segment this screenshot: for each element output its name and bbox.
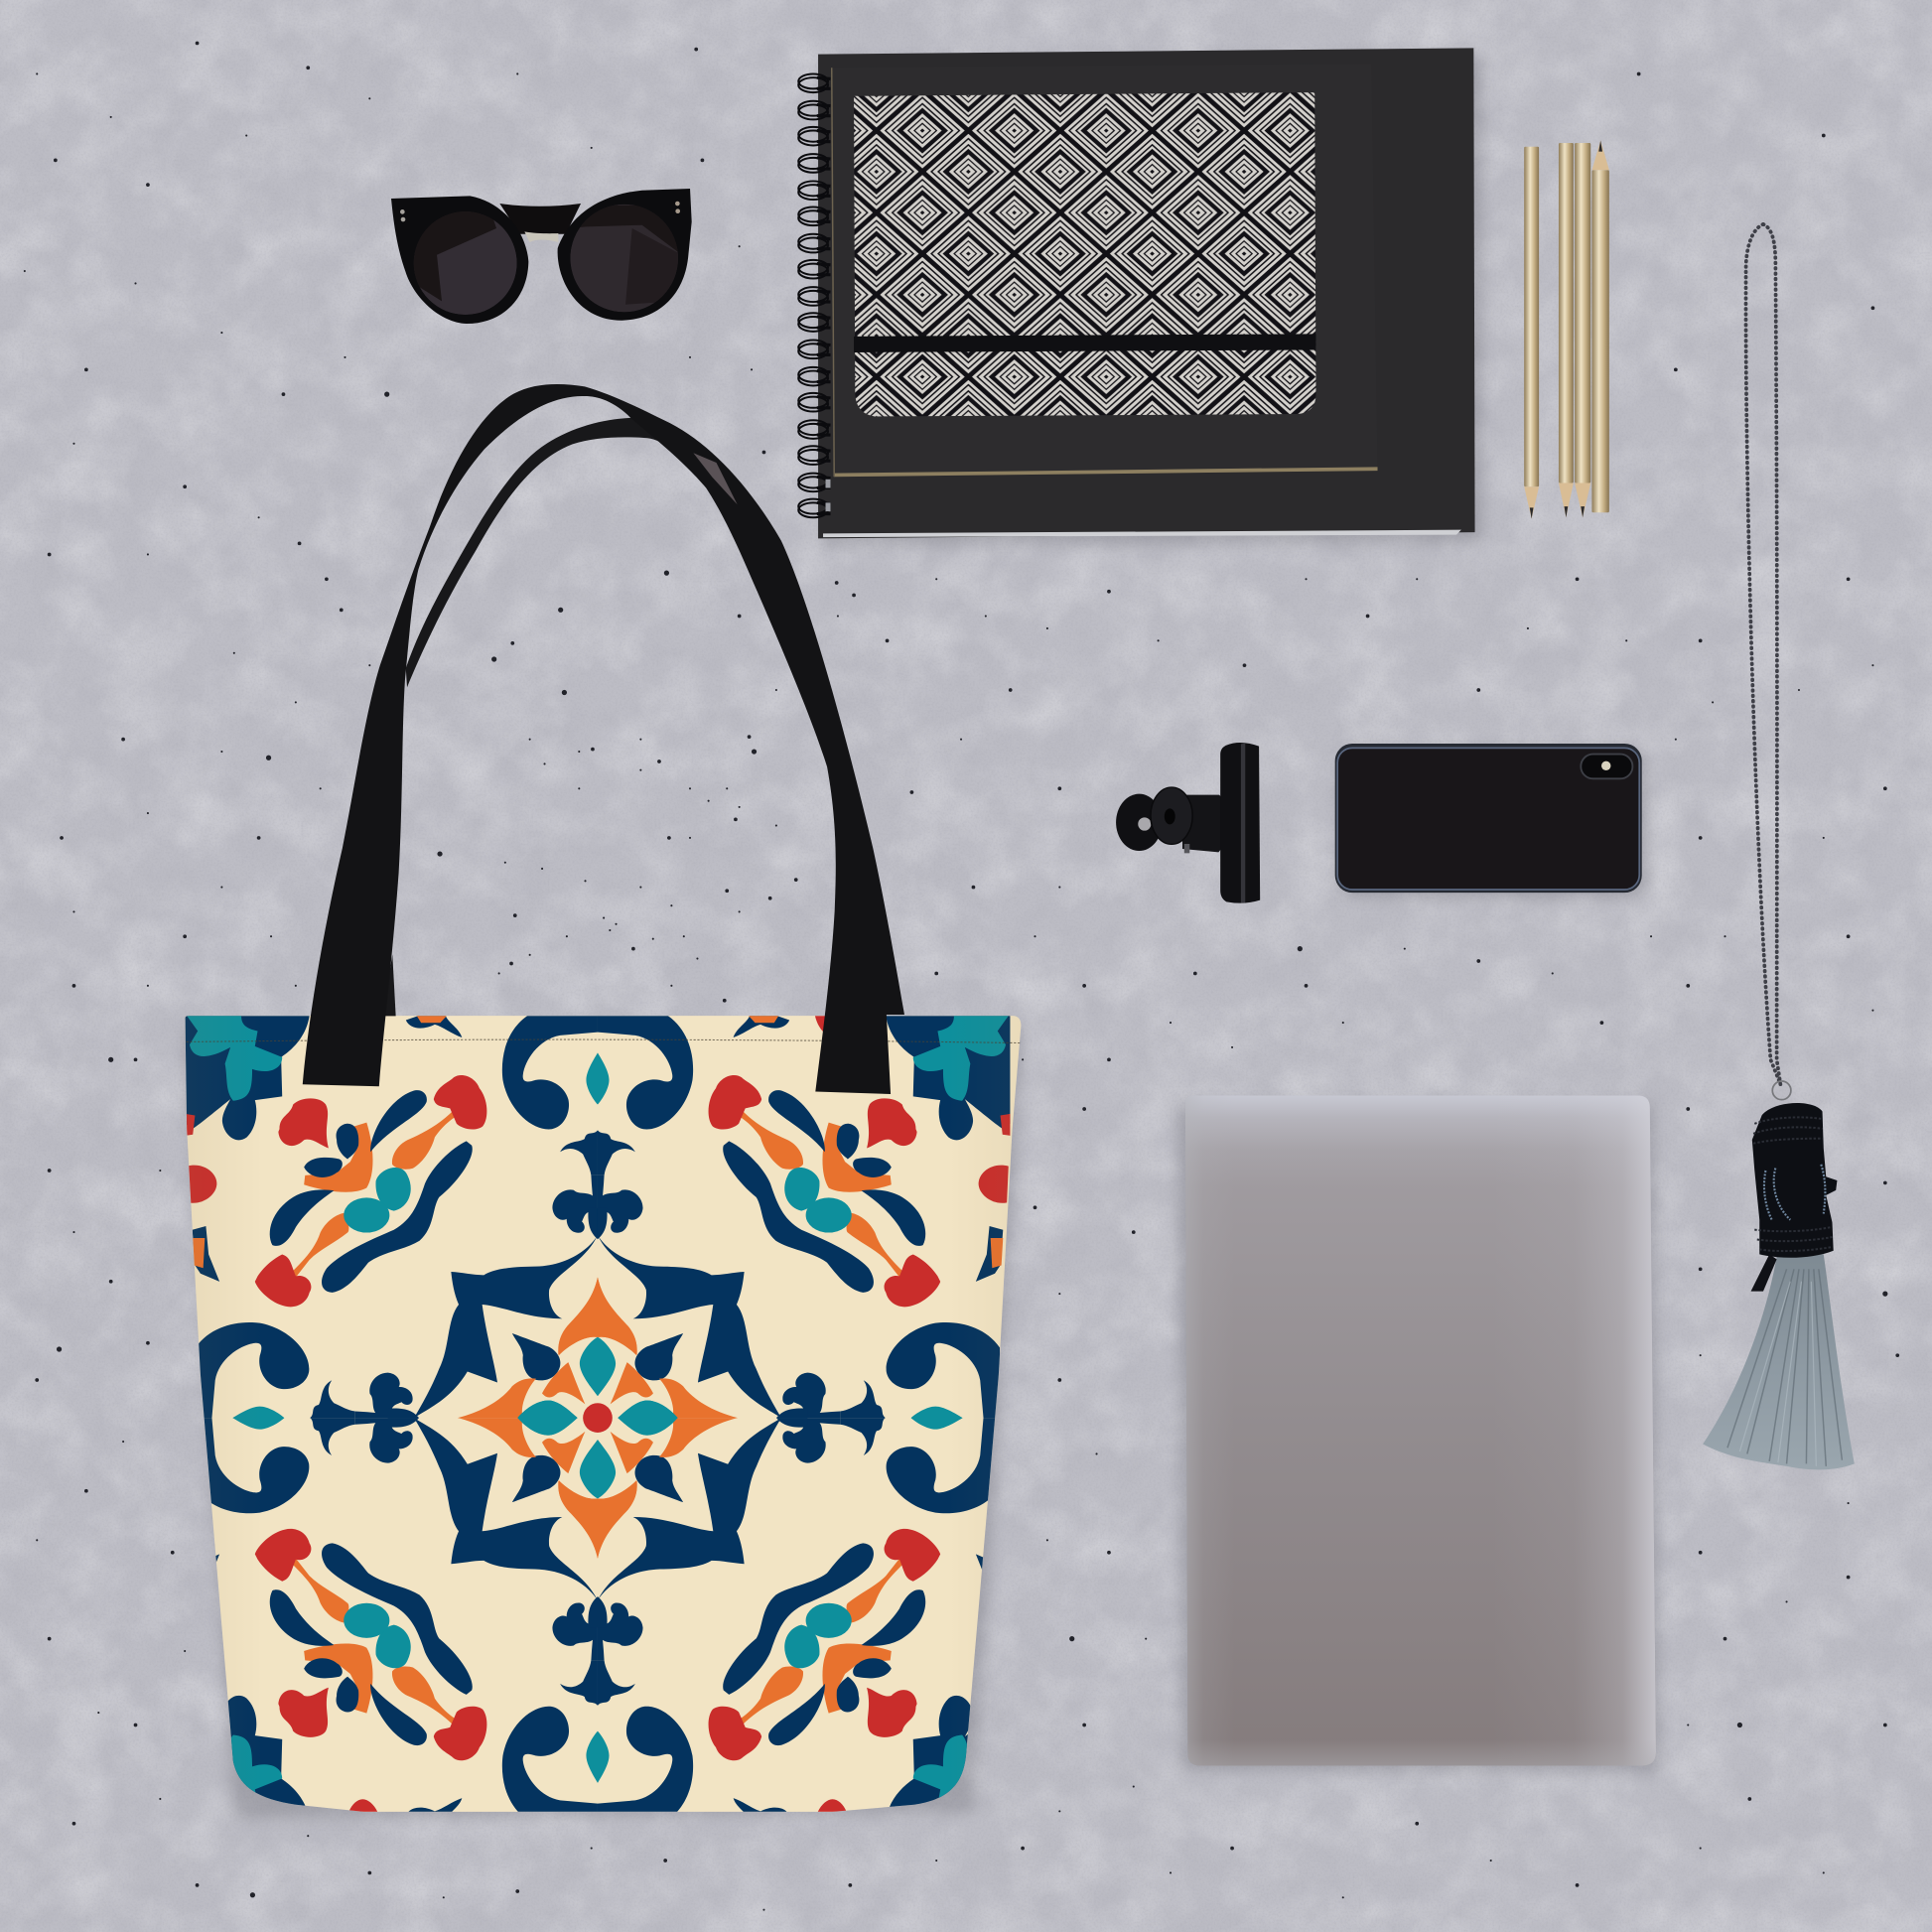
elastic band <box>854 334 1315 352</box>
front handle strap <box>303 384 904 1094</box>
bead rows <box>1753 1117 1832 1251</box>
tote handles <box>303 384 904 1094</box>
medium notebook <box>832 65 1378 477</box>
sunglasses <box>391 189 692 324</box>
large black notebook <box>818 48 1475 538</box>
necklace with beaded tassel <box>1703 224 1855 1469</box>
stacked notebooks <box>798 48 1475 538</box>
inner sliver of handle <box>693 453 738 504</box>
back handle strap <box>406 418 744 687</box>
tassel skirt <box>1703 1254 1855 1469</box>
gold pencils <box>1524 140 1609 518</box>
woven fabric notebook <box>854 92 1315 416</box>
pendant ring <box>1772 1081 1791 1100</box>
back strap lower tab <box>382 954 396 1016</box>
chain <box>1746 224 1780 1084</box>
print: axis scrolls and stems <box>196 1016 1000 1820</box>
print: red centre dot <box>583 1403 613 1433</box>
shadows under objects <box>185 56 1660 1818</box>
spiral binding <box>798 73 830 517</box>
laptop <box>1176 1084 1670 1774</box>
tassel fringe lines <box>1727 1269 1842 1466</box>
smartphone <box>1335 744 1642 893</box>
tassel side tab <box>1751 1254 1777 1292</box>
tote bag body with printed tile pattern <box>179 993 1033 1848</box>
beaded head <box>1752 1103 1837 1258</box>
binder clip <box>1116 743 1260 903</box>
hem stitch line <box>187 1039 1020 1043</box>
print: four quadrants <box>186 1016 1010 1820</box>
